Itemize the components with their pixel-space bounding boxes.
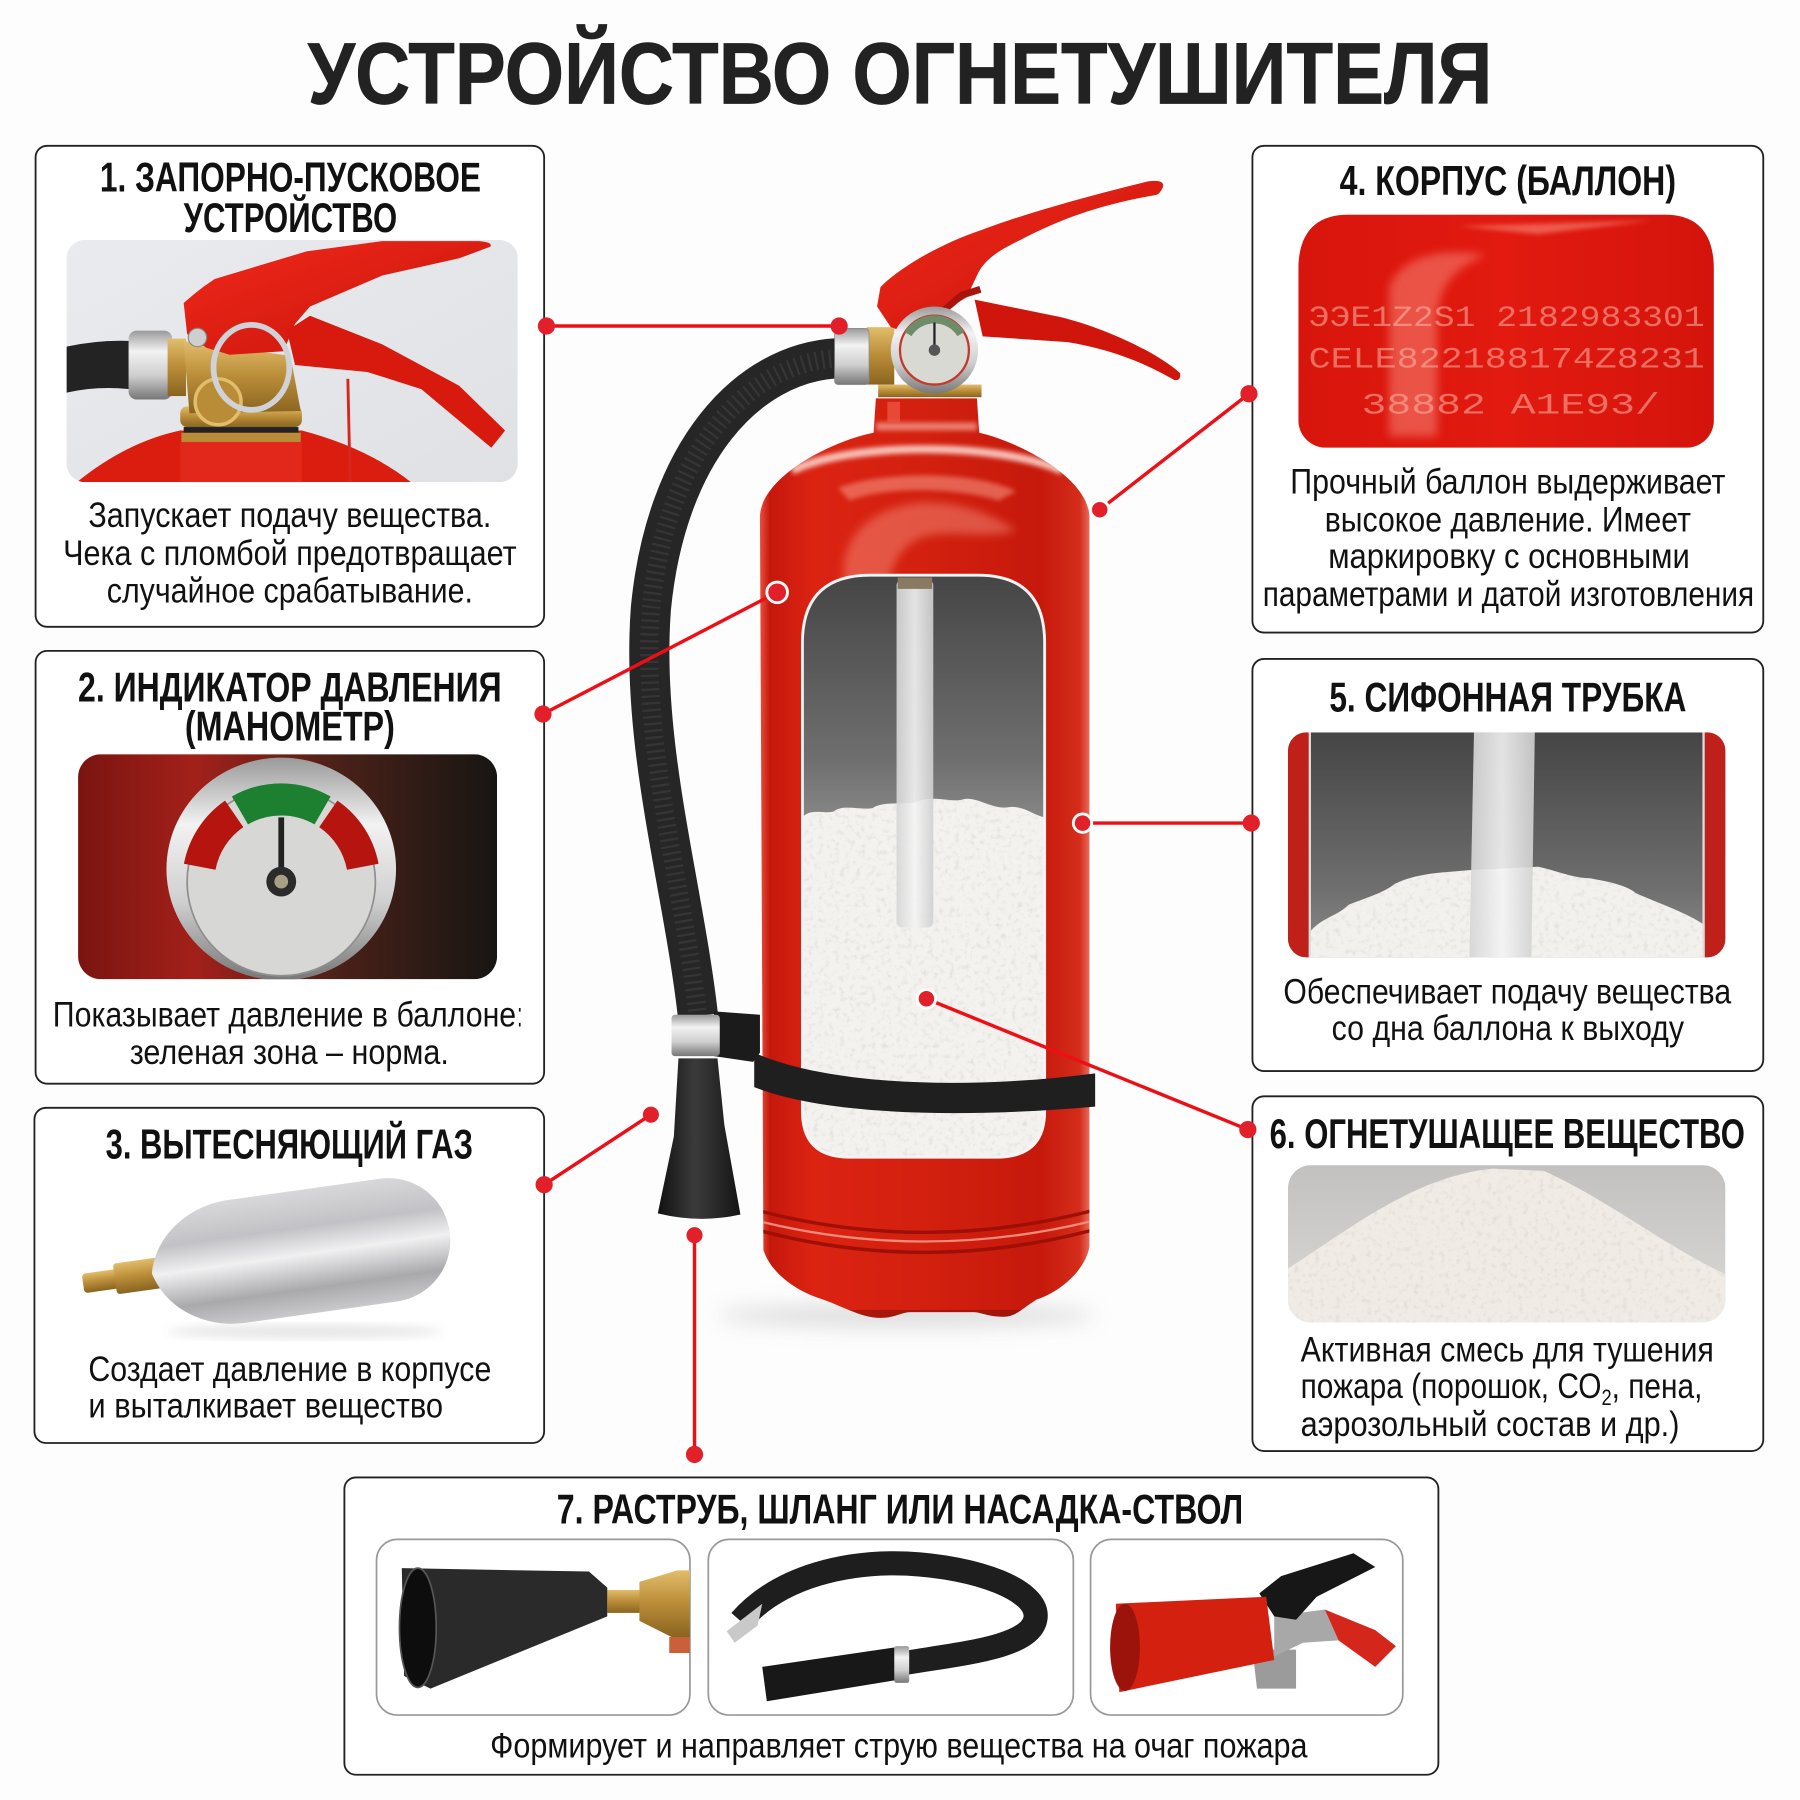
central fire extinguisher illustration bbox=[649, 181, 1180, 1327]
upper lever bbox=[877, 181, 1163, 333]
description 1 bbox=[63, 495, 517, 611]
heading 1: УСТРОЙСТВО bbox=[184, 195, 397, 241]
panel 6: extinguishing agent bbox=[1252, 1096, 1763, 1451]
description 3: Создает давление в корпусе bbox=[88, 1349, 491, 1389]
callout dots bbox=[534, 317, 1260, 1463]
description 1: Запускает подачу вещества. bbox=[88, 495, 491, 535]
panel 5: siphon tube bbox=[1252, 659, 1763, 1071]
heading 2: 2. ИНДИКАТОР ДАВЛЕНИЯ bbox=[78, 664, 502, 710]
description 4: высокое давление. Имеет bbox=[1325, 500, 1691, 540]
floor shadow bbox=[717, 1304, 1096, 1327]
description 2: зеленая зона – норма. bbox=[130, 1032, 449, 1072]
photo: hose bbox=[708, 1539, 1073, 1715]
description 6: , пена, bbox=[1612, 1366, 1702, 1406]
description 2 bbox=[53, 994, 525, 1072]
strap bbox=[754, 1053, 1095, 1113]
description 4 bbox=[1263, 462, 1754, 614]
photo: valve and lever bbox=[67, 240, 518, 482]
description 6: Активная смесь для тушения bbox=[1301, 1329, 1714, 1369]
photo: manometer bbox=[78, 754, 497, 980]
heading 3: 3. ВЫТЕСНЯЮЩИЙ ГАЗ bbox=[106, 1121, 473, 1167]
description 3 bbox=[88, 1349, 491, 1426]
description 5 bbox=[1283, 971, 1731, 1048]
panel 3: propellant gas bbox=[34, 1108, 544, 1443]
description 6: 2 bbox=[1601, 1385, 1612, 1410]
photo: gas capsule bbox=[81, 1170, 458, 1339]
photo: embossed marking: СЕLЕ822188174Z8231 bbox=[1309, 342, 1705, 376]
photo: siphon tube in powder bbox=[1288, 732, 1725, 957]
hose bbox=[649, 358, 838, 1016]
description 6: пожара (порошок, СО bbox=[1301, 1366, 1659, 1406]
panel 7: horn, hose or nozzle bbox=[344, 1477, 1438, 1775]
leader lines bbox=[543, 326, 1251, 1454]
cylinder body bbox=[760, 398, 1091, 1320]
heading 5: 5. СИФОННАЯ ТРУБКА bbox=[1329, 675, 1686, 721]
panel 4: cylinder shell bbox=[1252, 146, 1763, 633]
heading 1 bbox=[100, 155, 481, 241]
panel 1: shut-off device bbox=[36, 146, 544, 627]
heading 2: (МАНОМЕТР) bbox=[185, 703, 395, 749]
description 6 bbox=[1301, 1329, 1714, 1444]
description 5: Обеспечивает подачу вещества bbox=[1283, 971, 1731, 1011]
photo: embossed marking: ЭЭЕ1Z2S1 2182983301 bbox=[1309, 301, 1705, 335]
title: УСТРОЙСТВО ОГНЕТУШИТЕЛЯ bbox=[308, 24, 1492, 122]
description 4: маркировку с основными bbox=[1328, 536, 1690, 576]
heading 4: 4. КОРПУС (БАЛЛОН) bbox=[1340, 158, 1676, 204]
description 7: Формирует и направляет струю вещества на очаг пожара bbox=[490, 1726, 1308, 1766]
description 1: случайное срабатывание. bbox=[107, 571, 473, 611]
heading 7: 7. РАСТРУБ, ШЛАНГ ИЛИ НАСАДКА-СТВОЛ bbox=[557, 1486, 1243, 1532]
description 2: Показывает давление в баллоне: bbox=[53, 994, 525, 1034]
photo: horn bbox=[377, 1539, 690, 1715]
hose clamp bbox=[672, 1015, 720, 1056]
description 6: аэрозольный состав и др.) bbox=[1301, 1404, 1679, 1444]
pressure gauge bbox=[891, 307, 978, 394]
horn bbox=[658, 1058, 740, 1219]
photo: embossed marking bbox=[1298, 215, 1714, 448]
heading 1: 1. ЗАПОРНО-ПУСКОВОЕ bbox=[100, 155, 481, 201]
locking pin bbox=[941, 289, 980, 312]
description 3: и выталкивает вещество bbox=[88, 1386, 443, 1426]
valve block bbox=[835, 327, 982, 397]
panel 2: pressure indicator bbox=[36, 651, 544, 1084]
photo: nozzle bbox=[1091, 1539, 1403, 1715]
description 5: со дна баллона к выходу bbox=[1332, 1008, 1684, 1048]
photo: powder pile bbox=[1288, 1165, 1725, 1322]
lower lever bbox=[975, 300, 1180, 380]
photo: embossed marking: 38882 A1E93/ bbox=[1361, 388, 1660, 422]
description 1: Чека с пломбой предотвращает bbox=[63, 533, 517, 573]
heading 2 bbox=[78, 664, 502, 749]
cutaway window bbox=[802, 575, 1045, 1159]
bracket bbox=[714, 1011, 760, 1062]
description 4: Прочный баллон выдерживает bbox=[1290, 462, 1725, 502]
